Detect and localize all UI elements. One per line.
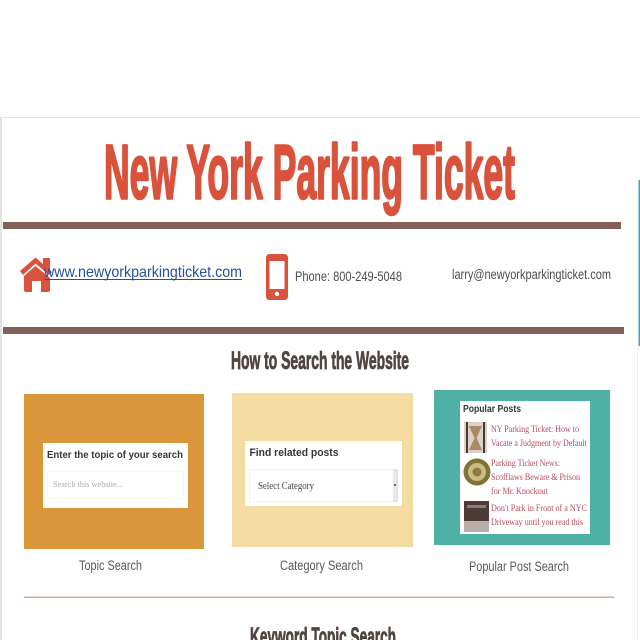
icon: phone bbox=[266, 254, 288, 300]
post 2: Scofflaws Beware & Prison bbox=[491, 472, 580, 483]
category widget: Find related posts bbox=[250, 447, 338, 459]
post 2 bbox=[491, 459, 580, 497]
popular posts widget bbox=[460, 401, 590, 534]
search widget: Search this website... bbox=[53, 480, 123, 489]
second divider bbox=[3, 327, 624, 334]
caption: Category Search bbox=[280, 558, 363, 573]
popular posts widget: Popular Posts bbox=[463, 404, 521, 415]
phone number: Phone: 800-249-5048 bbox=[295, 269, 402, 284]
search widget: Enter the topic of your search bbox=[47, 449, 183, 461]
search widget bbox=[43, 443, 188, 508]
post 3 bbox=[491, 503, 587, 528]
post 3: Don't Park in Front of a NYC bbox=[491, 503, 587, 514]
post 1: Vacate a Judgment by Default bbox=[491, 438, 587, 449]
top divider bbox=[3, 222, 621, 229]
thumbnail: badge bbox=[464, 458, 490, 486]
icon: house bbox=[20, 258, 52, 292]
panel: topic search bbox=[24, 394, 204, 573]
thumbnail: hourglass bbox=[464, 422, 487, 453]
panel: popular post search bbox=[434, 390, 610, 574]
category widget: Select Category bbox=[258, 481, 314, 492]
caption: Popular Post Search bbox=[469, 559, 569, 574]
post 3: Driveway until you read this bbox=[491, 518, 583, 528]
section divider bbox=[24, 596, 614, 598]
post 1 bbox=[491, 425, 587, 449]
post 2: for Mr. Knockout bbox=[491, 486, 548, 497]
post 2: Parking Ticket News: bbox=[491, 459, 560, 469]
category widget bbox=[245, 441, 402, 506]
thumbnail: building bbox=[464, 501, 489, 532]
panel: category search bbox=[232, 393, 413, 573]
website link: www.newyorkparkingticket.com bbox=[43, 264, 242, 281]
contact row bbox=[20, 254, 611, 300]
post 1: NY Parking Ticket: How to bbox=[491, 425, 579, 435]
heading: how to search: How to Search the Website bbox=[231, 347, 409, 375]
caption: Topic Search bbox=[79, 558, 142, 573]
